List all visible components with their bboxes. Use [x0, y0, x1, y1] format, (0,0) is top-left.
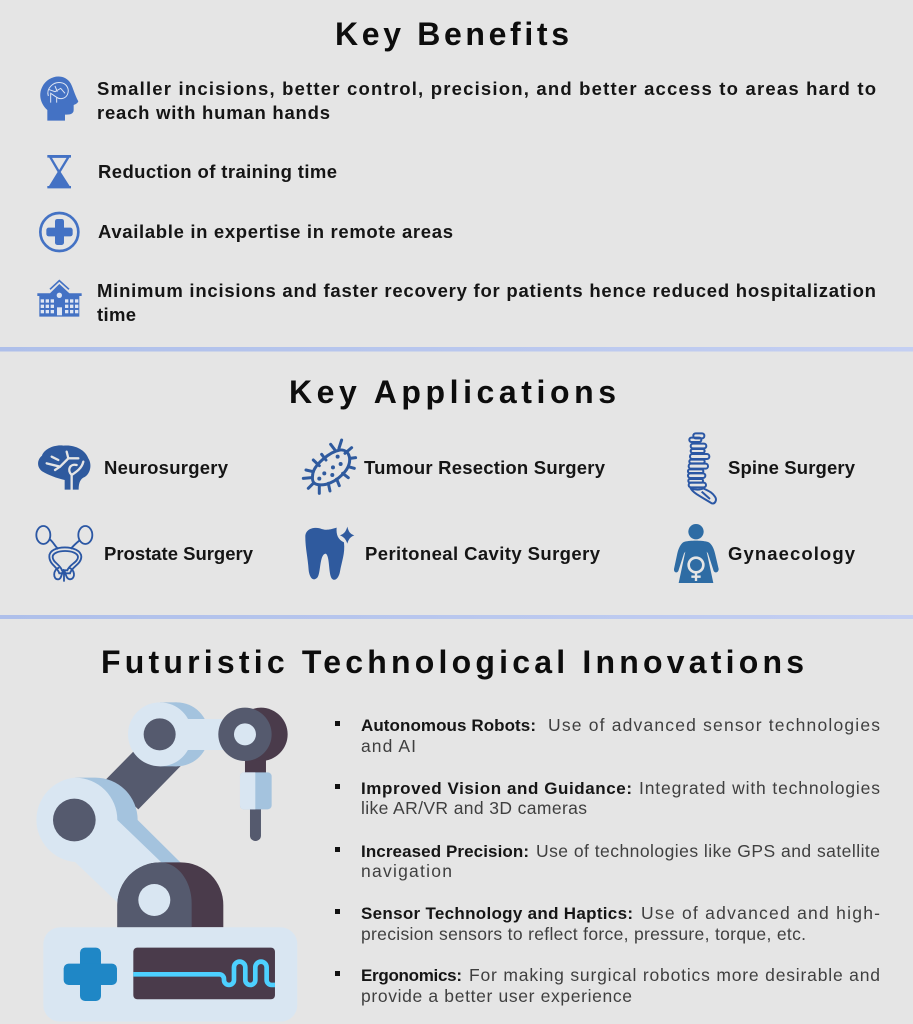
bullet: improved vision and guidance: Integrated with technologies	[639, 778, 880, 798]
benefit text: minimum incisions: Minimum incisions and faster recovery for patients hence reduced hospitalization	[97, 280, 876, 301]
application label: spine surgery: Spine Surgery	[728, 457, 856, 478]
bullet: improved vision and guidance	[335, 778, 880, 818]
benefit text: training time: Reduction of training time	[98, 161, 337, 182]
icon: hospital	[37, 281, 82, 317]
bullet list: innovations	[335, 715, 880, 1006]
bullet: improved vision and guidance: like AR/VR and 3D cameras	[361, 798, 587, 818]
bullet: ergonomics: provide a better user experience	[361, 986, 632, 1006]
bullet: increased precision: Increased Precision:	[361, 842, 529, 861]
bullet: ergonomics	[335, 965, 880, 1006]
icon: hourglass	[47, 155, 71, 188]
benefit text: smaller incisions: Smaller incisions, better control, precision, and better access to areas hard to	[97, 78, 876, 99]
application label: peritoneal cavity surgery: Peritoneal Cavity Surgery	[365, 543, 601, 564]
bullet: sensor technology and haptics: Sensor Technology and Haptics:	[361, 904, 633, 923]
heading: key applications: Key Applications	[289, 374, 616, 410]
bullet: sensor technology and haptics: precision sensors to reflect force, pressure, torque, etc.	[361, 924, 806, 944]
bullet: ergonomics: Ergonomics:	[361, 966, 462, 985]
icon: medical cross in circle	[40, 213, 78, 251]
bullet: autonomous robots: Use of advanced sensor technologies	[548, 715, 880, 735]
benefit text: smaller incisions	[97, 78, 876, 123]
heading: key benefits: Key Benefits	[335, 16, 569, 52]
bullet: ergonomics: For making surgical robotics more desirable and	[469, 965, 880, 985]
panel: futuristic technological innovations	[36, 644, 880, 1022]
bullet: autonomous robots: and AI	[361, 736, 416, 756]
heading: futuristic technological innovations: Futuristic Technological Innovations	[101, 644, 804, 680]
bullet: increased precision: navigation	[361, 861, 452, 881]
bullet: improved vision and guidance: Improved Vision and Guidance:	[361, 779, 632, 798]
benefit text: smaller incisions: reach with human hands	[97, 102, 330, 123]
icon: tooth with sparkle	[305, 527, 354, 580]
panel: key benefits	[37, 16, 876, 325]
bullet: increased precision	[335, 841, 880, 881]
application label: prostate surgery: Prostate Surgery	[104, 543, 254, 564]
application label: tumour resection surgery: Tumour Resection Surgery	[364, 457, 606, 478]
icon: woman with venus symbol	[674, 524, 719, 583]
bullet: sensor technology and haptics: Use of advanced and high-	[641, 903, 880, 923]
benefit text: remote areas: Available in expertise in remote areas	[98, 221, 453, 242]
bullet: sensor technology and haptics	[335, 903, 880, 944]
benefit text: minimum incisions	[97, 280, 876, 325]
icon: urinary system	[36, 526, 92, 582]
bullet: autonomous robots: Autonomous Robots:	[361, 716, 536, 735]
bullet: increased precision: Use of technologies like GPS and satellite	[536, 841, 880, 861]
illustration: robotic arm	[36, 702, 297, 1022]
bullet: autonomous robots	[335, 715, 880, 756]
icon: spine	[688, 433, 716, 503]
application label: neurosurgery: Neurosurgery	[104, 457, 229, 478]
benefit text: minimum incisions: time	[97, 304, 136, 325]
application label: gynaecology: Gynaecology	[728, 543, 856, 564]
panel: key applications	[36, 374, 856, 583]
icon: microbe	[303, 440, 356, 493]
icon: brain	[38, 445, 90, 490]
icon: head with brain	[40, 77, 78, 121]
